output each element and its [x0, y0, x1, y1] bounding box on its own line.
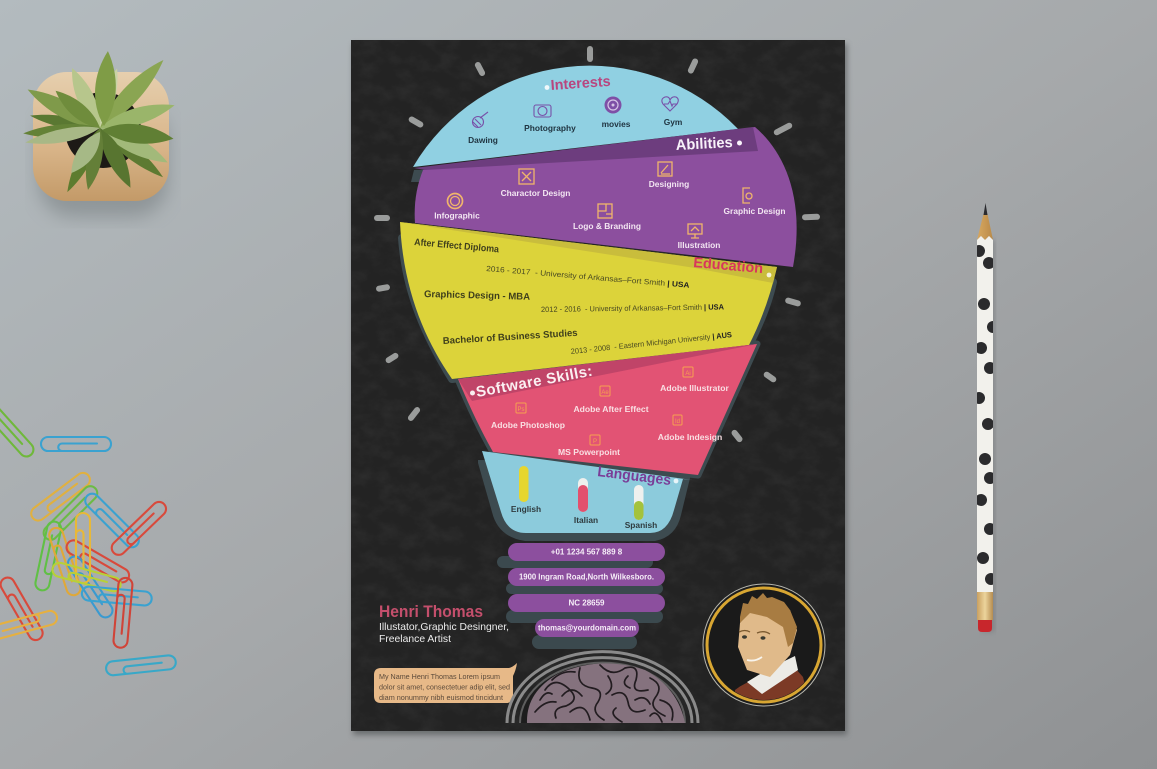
software skills heading: Software Skills:: [475, 363, 594, 401]
bar: Italian: Italian: [574, 515, 598, 525]
contact: address: [508, 568, 665, 586]
label: designing: Designing: [649, 179, 689, 189]
bar: Spanish: [625, 485, 657, 530]
icon: indesign: [673, 415, 682, 425]
entry: graphics design MBA: Graphics Design - MBA: [424, 289, 530, 303]
bar: English: [511, 466, 541, 514]
label: photography: Photography: [524, 123, 576, 133]
bar: Spanish: Spanish: [625, 520, 657, 530]
icon: movies: [604, 96, 622, 114]
icon: logo and branding: [598, 204, 612, 218]
contact: phone: +01 1234 567 889 8: [551, 548, 623, 556]
speech bubble: diam nonummy nibh euismod tincidunt: [379, 693, 503, 702]
entry: bachelor of business studies: [443, 328, 732, 356]
label: indesign: Adobe Indesign: [658, 432, 722, 442]
bulb screw base shadows: [497, 556, 663, 649]
bulb slice shadows: [402, 170, 773, 541]
plant in wooden pot: [23, 51, 177, 217]
icon: drawing: [472, 112, 488, 128]
entry: bachelor of business studies: Bachelor of Business Studies: [443, 328, 578, 347]
polka dot pencil: [977, 203, 996, 633]
entry: after effect diploma: 2016 - 2017 - University of Arkansas–Fort Smith | USA: [486, 264, 690, 290]
education heading: Education: [693, 255, 764, 277]
icon: after effects: [600, 386, 610, 396]
entry: graphics design MBA: 2012 - 2016 - University of Arkansas–Fort Smith | USA: [541, 302, 725, 314]
icon: powerpoint: P: [593, 439, 597, 445]
icon: illustrator: [683, 367, 693, 377]
brain illustration: [507, 652, 698, 723]
icon: illustration: [688, 224, 702, 238]
languages heading: Languages: [597, 464, 672, 489]
name and title: Illustator,Graphic Desingner,: [379, 621, 509, 633]
paper clips: [0, 398, 176, 676]
icon: photoshop: Ps: [517, 407, 525, 413]
contact: zip code: [508, 594, 665, 612]
contact: address: 1900 Ingram Road,North Wilkesboro.: [519, 572, 654, 582]
speech bubble: dolor sit amet, consectetuer adip elit, sed: [379, 682, 510, 692]
panel: software skills: [458, 344, 757, 475]
interests heading: Interests: [550, 74, 611, 94]
icon: photography: [534, 105, 551, 117]
label: illustration: Illustration: [678, 240, 720, 250]
label: drawing: Dawing: [468, 135, 498, 145]
icon: character design: [519, 169, 534, 184]
bar: English: English: [511, 504, 541, 514]
label: illustrator: Adobe Illustrator: [660, 383, 730, 393]
icon: photoshop: [516, 403, 526, 413]
label: logo and branding: Logo & Branding: [573, 221, 641, 231]
entry: after effect diploma: [414, 237, 690, 290]
software skills banner: [458, 344, 757, 401]
abilities heading: Abilities: [675, 134, 733, 154]
icon: designing: [658, 162, 672, 176]
label: after effects: Adobe After Effect: [573, 404, 649, 414]
icon: illustrator: Ai: [685, 371, 691, 377]
label: photoshop: Adobe Photoshop: [491, 420, 565, 430]
entry: after effect diploma: After Effect Diploma: [414, 237, 500, 255]
panel: languages base: [482, 451, 692, 533]
icon: graphic design: [743, 188, 752, 203]
label: infographic: Infographic: [434, 210, 480, 220]
name and title: Henri Thomas: [379, 602, 483, 621]
speech bubble: [374, 663, 517, 703]
label: character design: Charactor Design: [501, 188, 570, 198]
abilities banner: [414, 127, 758, 170]
contact: zip code: NC 28659: [568, 598, 605, 608]
bar: Italian: [574, 478, 598, 525]
education banner: [400, 222, 777, 283]
label: powerpoint: MS Powerpoint: [558, 447, 620, 457]
name and title: Freelance Artist: [379, 633, 451, 645]
entry: graphics design MBA: [424, 289, 725, 314]
name and title: [379, 602, 509, 645]
label: gym: Gym: [664, 117, 682, 127]
icon: after effects: Ae: [601, 390, 609, 396]
panel: abilities: [414, 127, 797, 267]
panel: education: [400, 222, 777, 379]
label: movies: movies: [602, 119, 631, 129]
icon: powerpoint: [590, 435, 600, 445]
entry: bachelor of business studies: 2013 - 2008 - Eastern Michigan University | AUS: [570, 330, 732, 356]
label: graphic design: Graphic Design: [724, 206, 785, 216]
contact: phone: [508, 543, 665, 561]
icon: indesign: Id: [675, 419, 680, 425]
resume paper: [351, 40, 847, 735]
portrait badge: [703, 584, 825, 706]
speech bubble: My Name Henri Thomas Lorem ipsum: [379, 672, 500, 681]
contact: email: thomas@yourdomain.com: [538, 624, 636, 632]
contact: email: [535, 619, 639, 637]
bulb light rays: [374, 46, 820, 443]
panel: interests: [413, 66, 738, 167]
icon: gym heart: [662, 97, 678, 111]
icon: infographic: [448, 194, 462, 208]
